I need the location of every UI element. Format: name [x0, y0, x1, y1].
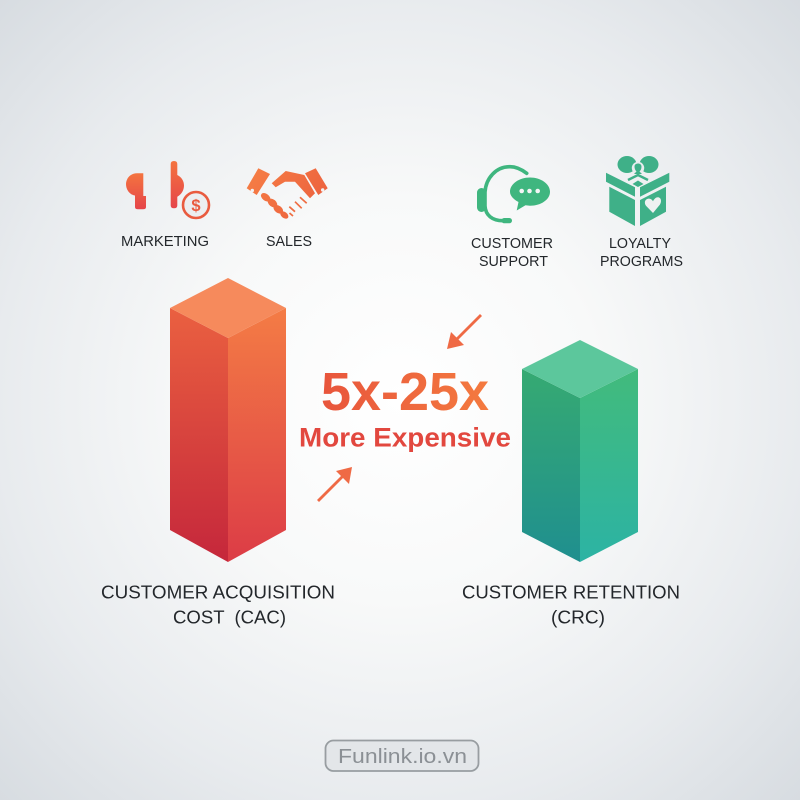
label: sales: SALES [266, 234, 312, 250]
label: customer acquisition cost [101, 582, 335, 628]
icon: customer support headset with chat bubble [477, 167, 550, 223]
label: customer retention: CUSTOMER RETENTION [462, 582, 680, 602]
icon: marketing megaphone and dollar coin [126, 161, 209, 218]
arrow: bottom left pointing up-right [318, 467, 352, 501]
callout: more expensive: More Expensive [299, 422, 511, 452]
chart: customer retention cost bar [522, 340, 638, 562]
callout: 5x-25x multiplier: 5x-25x [321, 362, 489, 422]
arrow: top right pointing down-left [447, 315, 481, 349]
label: customer support: SUPPORT [479, 254, 548, 270]
icon: marketing megaphone and dollar coin: $ [191, 197, 201, 215]
label: loyalty programs [600, 236, 683, 270]
label: customer support [471, 236, 553, 270]
label: customer acquisition cost: COST (CAC) [173, 606, 286, 628]
chart: customer acquisition cost bar [170, 278, 286, 562]
icon: loyalty programs gift box [606, 156, 669, 226]
label: loyalty programs: PROGRAMS [600, 254, 683, 270]
label: loyalty programs: LOYALTY [609, 236, 671, 252]
label: marketing: MARKETING [121, 234, 209, 250]
watermark: Funlink.io.vn [326, 740, 478, 771]
label: customer retention [462, 582, 680, 628]
label: customer support: CUSTOMER [471, 236, 553, 252]
watermark: Funlink.io.vn: Funlink.io.vn [338, 746, 467, 768]
icon: sales handshake [247, 168, 328, 220]
label: customer retention: (CRC) [551, 606, 605, 628]
label: customer acquisition cost: CUSTOMER ACQUISITION [101, 582, 335, 602]
